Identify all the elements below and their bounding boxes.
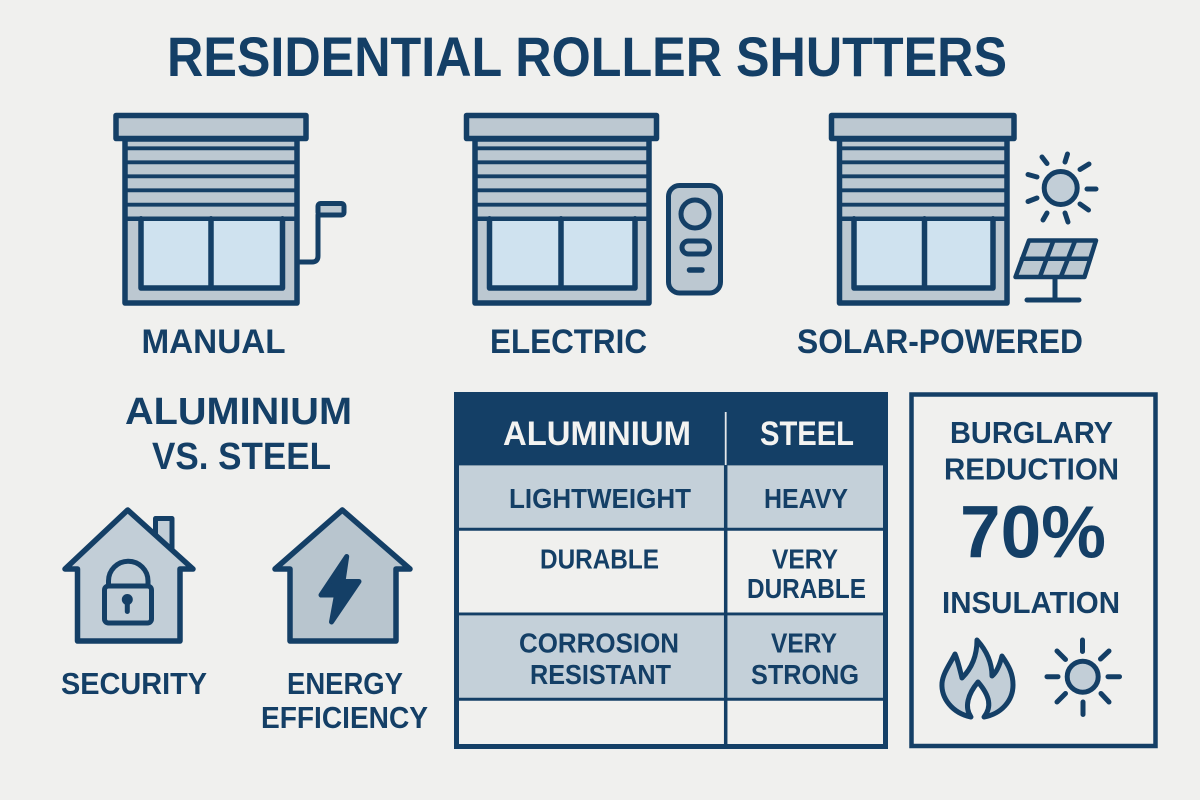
label: energy efficiency: ENERGY (287, 666, 403, 701)
icon: insulation sun (1047, 640, 1120, 714)
icon: house with lightning bolt (275, 510, 410, 641)
stat: burglary reduction: REDUCTION (944, 452, 1119, 486)
table header row: ALUMINIUM (503, 415, 691, 453)
table header row: STEEL (760, 415, 854, 453)
heading: aluminium vs steel (125, 391, 352, 478)
row: durability: DURABLE (540, 544, 659, 574)
comparison table (454, 392, 888, 746)
row: strength: STRONG (751, 659, 859, 690)
row: strength: RESISTANT (530, 659, 671, 690)
icon: manual roller shutter with crank (116, 116, 344, 303)
label: solar-powered: SOLAR-POWERED (797, 323, 1083, 361)
icon: flame (942, 640, 1013, 717)
row: strength: CORROSION (519, 628, 679, 658)
icon: house with padlock (65, 510, 193, 641)
row: weight: HEAVY (764, 483, 848, 514)
label: energy efficiency (261, 666, 428, 735)
title: RESIDENTIAL ROLLER SHUTTERS (167, 25, 1007, 88)
heading: aluminium vs steel: ALUMINIUM (125, 391, 352, 433)
row: strength: VERY (771, 628, 837, 658)
icon: electric roller shutter with remote (466, 116, 656, 303)
stat: burglary reduction: 70% (960, 490, 1106, 574)
icon: sun (1028, 154, 1096, 222)
label: energy efficiency: EFFICIENCY (261, 700, 428, 735)
icon: solar roller shutter (832, 116, 1014, 303)
label: insulation: INSULATION (942, 585, 1120, 620)
row: durability: DURABLE (747, 573, 866, 604)
row: weight (459, 466, 884, 528)
label: manual: MANUAL (142, 323, 286, 361)
panel: burglary reduction and insulation (912, 394, 1156, 746)
row: durability: VERY (772, 544, 838, 574)
row: weight: LIGHTWEIGHT (509, 483, 691, 514)
heading: aluminium vs steel: VS. STEEL (152, 436, 331, 478)
row: durability (540, 544, 866, 604)
stat: burglary reduction: BURGLARY (950, 415, 1113, 450)
label: security: SECURITY (61, 666, 207, 701)
icon: remote control (668, 186, 720, 293)
row: strength (459, 616, 884, 698)
stat: burglary reduction (944, 415, 1119, 574)
label: electric: ELECTRIC (490, 323, 647, 361)
icon: solar panel (1016, 240, 1096, 300)
table header row (454, 392, 888, 466)
